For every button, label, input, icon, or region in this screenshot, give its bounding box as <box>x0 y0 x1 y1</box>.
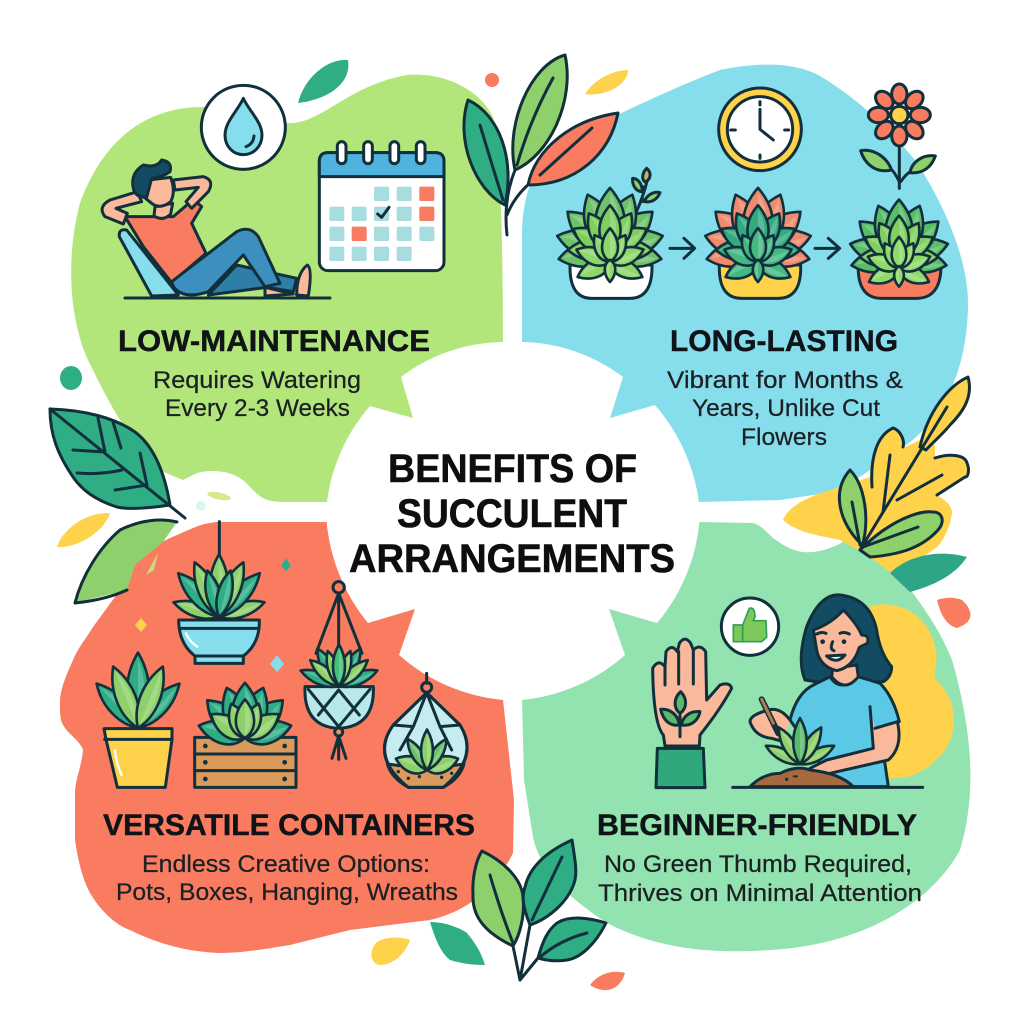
icon: yellow pot <box>719 265 801 298</box>
icon: white pot <box>570 265 652 298</box>
icon: third succulent rosette <box>847 200 951 289</box>
icon: gardener <box>733 595 923 787</box>
decor: lower left light leaf <box>75 520 177 603</box>
icon: relaxing man <box>102 160 330 298</box>
text: low-maintenance description: Requires Watering <box>153 367 361 394</box>
title <box>349 447 675 581</box>
decor: yellow blob behind gardener <box>870 604 954 778</box>
text: long-lasting description: Flowers <box>741 424 827 451</box>
heading: long-lasting: LONG-LASTING <box>670 325 898 358</box>
text: beginner-friendly description <box>598 851 922 907</box>
icon: plant in macrame hanger <box>298 645 380 692</box>
text: beginner-friendly description: Thrives on Minimal Attention <box>598 880 922 907</box>
icon: wooden crate <box>195 737 296 787</box>
text: versatile containers description: Pots, Boxes, Hanging, Wreaths <box>116 879 458 906</box>
decor: bottom leaf branch <box>473 840 606 980</box>
decor: top leaf branch <box>464 55 618 235</box>
icon: coral pot <box>858 263 941 298</box>
text: beginner-friendly description: No Green Thumb Required, <box>604 851 912 878</box>
title: ARRANGEMENTS <box>349 537 675 581</box>
decor: sparkles <box>135 558 291 672</box>
decor: yellow blob behind right foliage <box>783 428 968 573</box>
arrow: second to third plant <box>815 238 840 258</box>
decor: yellow petal left <box>57 513 110 547</box>
icon: macrame hanger <box>305 582 373 759</box>
icon: flower <box>861 84 935 188</box>
icon: glass terrarium <box>385 673 467 787</box>
text: long-lasting description: Vibrant for Months & <box>667 367 903 394</box>
title: BENEFITS OF <box>388 447 637 491</box>
icon group: gardener, hand and thumbs up <box>653 595 923 788</box>
icon: plant in yellow pot <box>90 653 186 734</box>
icon: succulent in crate <box>196 683 294 749</box>
icon: sprig on first plant <box>633 168 660 215</box>
panel: low-maintenance background <box>71 75 503 502</box>
text: versatile containers description <box>116 851 458 906</box>
icon: water drop in circle <box>201 85 285 169</box>
icon group: relaxing man, water drop and calendar <box>102 85 444 298</box>
icon: first succulent rosette <box>554 188 666 285</box>
icon: plant in terrarium <box>393 730 461 777</box>
icon: hanging blue bowl <box>179 522 259 663</box>
arrow: first to second plant <box>670 238 695 258</box>
icon: second succulent rosette <box>702 188 814 285</box>
icon: calendar <box>319 142 444 271</box>
heading: beginner-friendly: BEGINNER-FRIENDLY <box>597 809 917 842</box>
icon group: containers <box>104 522 467 787</box>
panel: versatile containers background <box>60 522 514 953</box>
heading: versatile containers: VERSATILE CONTAINERS <box>103 809 475 842</box>
icon group: clock, flower and three pots <box>570 84 941 298</box>
decor: faint marks near panels <box>146 490 231 575</box>
icon: thumbs up circle <box>721 598 779 655</box>
decor: yellow petal <box>585 70 628 94</box>
text: versatile containers description: Endless Creative Options: <box>142 851 430 878</box>
decor: teal leaf bottom <box>430 922 485 965</box>
icon: plant in blue bowl <box>171 554 267 624</box>
decor: right foliage <box>839 377 969 592</box>
panel: beginner-friendly background <box>522 522 970 951</box>
icon: hand with sprout <box>653 639 732 788</box>
text: low-maintenance description <box>153 367 361 422</box>
decor: teal dot left <box>60 366 82 390</box>
text: long-lasting description <box>667 367 903 451</box>
panel: long-lasting background <box>522 65 968 502</box>
decor: small top leaf <box>298 60 348 103</box>
icon: clock <box>719 88 801 171</box>
center: white notched circle <box>326 342 700 700</box>
decor: large left leaf <box>50 409 185 518</box>
decor: coral petal bottom <box>590 972 625 990</box>
decor: coral dot <box>485 73 499 87</box>
decor: coral petal right <box>937 598 970 628</box>
icon: seedling in soil <box>763 718 837 769</box>
text: low-maintenance description: Every 2-3 Weeks <box>165 395 350 422</box>
title: SUCCULENT <box>397 492 627 536</box>
heading: low-maintenance: LOW-MAINTENANCE <box>118 325 430 358</box>
icon: yellow pot <box>104 729 172 787</box>
text: long-lasting description: Years, Unlike Cut <box>692 395 880 422</box>
decor: yellow petal bottom <box>371 938 410 965</box>
